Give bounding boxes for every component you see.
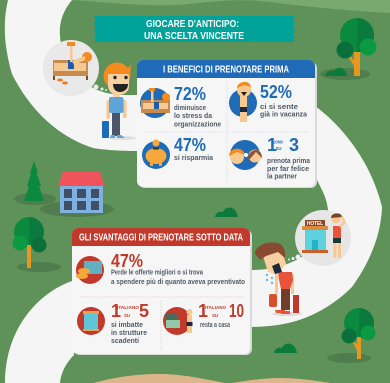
benefit: 1 uomo su 3: 3 — [289, 135, 299, 155]
thought bubble: hotel: HOTEL — [307, 221, 323, 227]
drawback: 1 italiano su 10: ITALIANO — [205, 305, 226, 310]
drawback: 47%: 47% — [111, 251, 143, 271]
drawback: 1 italiano su 5: ITALIANO — [117, 305, 140, 310]
drawback: 1 italiano su 10: SU — [212, 313, 218, 318]
drawback: 1 italiano su 5: 1 — [111, 301, 121, 321]
drawback: 1 italiano su 5: in strutture — [111, 328, 147, 337]
benefit: 47% savings: si risparmia — [174, 153, 214, 162]
drawback: 47%: a spendere più di quanto aveva preventivato — [111, 279, 245, 286]
benefit: 1 uomo su 3: SU — [276, 146, 282, 151]
drawback: 1 italiano su 10: 1 — [198, 301, 208, 321]
benefit: 1 uomo su 3: prenota prima — [267, 156, 311, 165]
title banner — [94, 16, 295, 42]
sad man with red suitcases — [255, 242, 302, 316]
pine tree — [14, 161, 56, 205]
benefit: 52%: già in vacanza — [260, 110, 308, 118]
benefits heading: I BENEFICI DI PRENOTARE PRIMA — [163, 64, 289, 76]
drawback: 1 italiano su 5: 5 — [139, 301, 149, 321]
bushes — [215, 208, 297, 353]
benefit: 1 uomo su 3 — [229, 135, 311, 180]
tree top right — [320, 18, 376, 80]
benefit: 1 uomo su 3: 1 — [267, 135, 277, 155]
house — [40, 172, 114, 217]
benefit: 72%: lo stress da — [174, 111, 213, 120]
drawbacks heading: GLI SVANTAGGI DI PRENOTARE SOTTO DATA — [79, 232, 243, 244]
drawback: 1 italiano su 5 — [77, 301, 149, 345]
title banner: GIOCARE D'ANTICIPO: — [146, 19, 239, 30]
thought bubble: hotel — [288, 210, 351, 266]
benefit: 52%: 52% — [260, 82, 292, 102]
benefit: 1 uomo su 3: UOMO — [273, 140, 283, 144]
drawback: 1 italiano su 5: si imbatte — [111, 320, 143, 329]
title banner: UNA SCELTA VINCENTE — [144, 31, 244, 42]
top hill — [70, 0, 390, 13]
drawback: 1 italiano su 5: SU — [124, 313, 130, 318]
drawback: 1 italiano su 10 — [163, 301, 244, 335]
benefit: 52%: ci si sente — [260, 102, 298, 111]
happy man with blue suitcase — [102, 62, 136, 140]
panel: drawbacks — [72, 228, 252, 355]
benefit: 72% — [140, 84, 221, 128]
panel: benefits — [137, 60, 317, 188]
benefit: 1 uomo su 3: la partner — [267, 172, 297, 180]
bottom sand hills — [93, 374, 330, 383]
drawback: 1 italiano su 10: 10 — [229, 301, 244, 321]
benefit: 72%: organizzazione — [174, 120, 221, 128]
benefit: 1 uomo su 3: per far felice — [267, 164, 309, 173]
tree lower right — [327, 308, 376, 363]
benefit: 52% — [229, 82, 308, 122]
benefit: 72%: 72% — [174, 84, 206, 104]
tree lower left — [12, 217, 61, 272]
drawback: 1 italiano su 5: scadenti — [111, 336, 139, 345]
drawback: 47%: Perde le offerte migliori o si trova — [111, 270, 203, 276]
thought bubble: beach bed — [43, 40, 107, 96]
benefit: 47% savings — [142, 135, 214, 169]
drawback: 47% — [76, 251, 245, 286]
drawback: 1 italiano su 10: resta a casa — [200, 320, 231, 329]
benefit: 72%: diminuisce — [174, 103, 206, 112]
benefit: 47% savings: 47% — [174, 135, 206, 155]
